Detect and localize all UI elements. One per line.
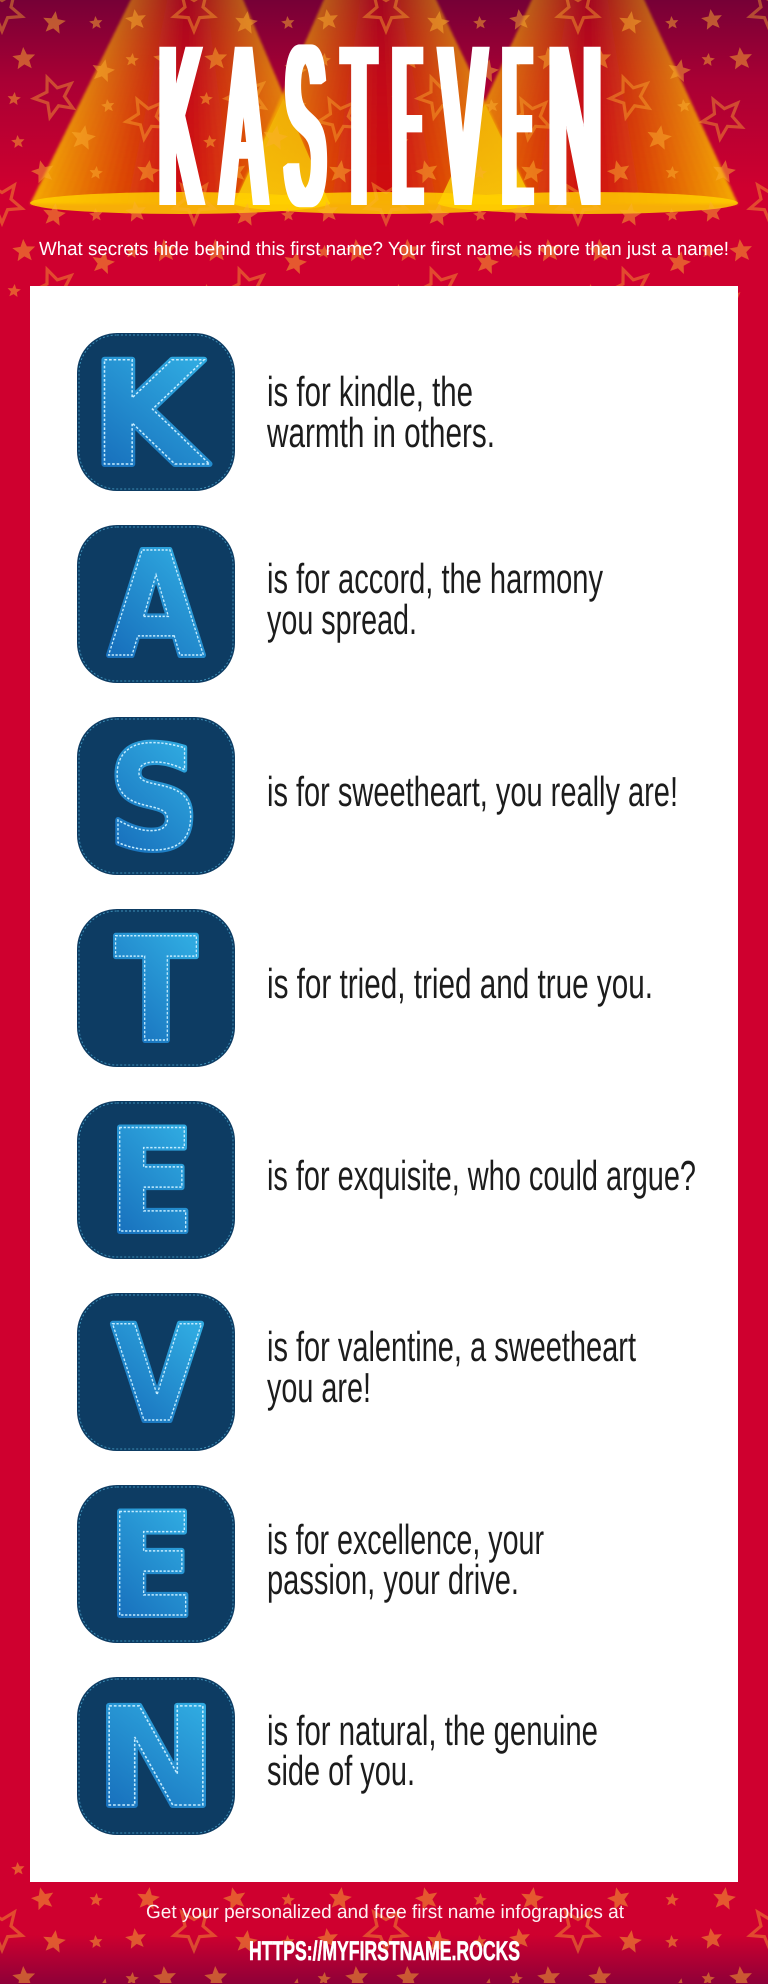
icon: letter E bbox=[77, 1100, 235, 1265]
star pattern: top bbox=[0, 0, 768, 300]
row: S bbox=[77, 717, 678, 882]
row: A bbox=[77, 521, 603, 689]
icon: letter V: V bbox=[112, 1298, 202, 1452]
icon: letter T bbox=[77, 907, 235, 1074]
row: T bbox=[77, 907, 653, 1074]
row: E bbox=[77, 1100, 696, 1265]
text: second E line bbox=[267, 1516, 544, 1603]
title: V bbox=[442, 0, 484, 254]
title: T bbox=[344, 0, 374, 254]
icon: letter S: S bbox=[108, 717, 200, 882]
row: N bbox=[77, 1677, 598, 1838]
text: V line bbox=[267, 1323, 636, 1411]
spotlight: left bbox=[30, 0, 337, 204]
icon: letter V: V bbox=[112, 1298, 202, 1452]
text: N line bbox=[267, 1707, 598, 1794]
title: S bbox=[286, 0, 324, 254]
text: K line: is for kindle, the bbox=[267, 368, 473, 415]
text: A line bbox=[267, 555, 603, 643]
spotlight overlap glow bbox=[234, 99, 534, 204]
icon: letter E: E bbox=[108, 1100, 195, 1265]
icon: letter T: T bbox=[115, 907, 197, 1074]
row: second E bbox=[77, 1484, 544, 1649]
icon: letter E: E bbox=[108, 1484, 195, 1649]
icon: letter E: E bbox=[108, 1484, 195, 1649]
subtitle: What secrets hide behind this first name? Your first name is more than just a name! bbox=[39, 239, 729, 260]
icon: letter E bbox=[77, 1484, 235, 1649]
text: V line: you are! bbox=[267, 1364, 371, 1411]
text: K line bbox=[266, 368, 495, 456]
text: A line: is for accord, the harmony bbox=[267, 555, 603, 602]
icon: letter N: N bbox=[96, 1680, 216, 1838]
row: K bbox=[77, 331, 495, 498]
spotlight: middle bbox=[230, 0, 534, 204]
infographic page: N bbox=[549, 0, 601, 254]
icon: letter N: N bbox=[96, 1680, 216, 1838]
icon: letter V bbox=[77, 1293, 235, 1452]
title: E bbox=[394, 0, 420, 254]
row: V bbox=[77, 1293, 636, 1452]
icon: letter A: A bbox=[108, 521, 204, 689]
spotlight: right bbox=[482, 0, 740, 206]
text: K line: warmth in others. bbox=[266, 409, 495, 456]
star pattern: bottom bbox=[0, 1860, 768, 1983]
title: A bbox=[222, 0, 264, 254]
icon: letter T: T bbox=[115, 907, 197, 1074]
text: second E line: is for excellence, your bbox=[267, 1516, 544, 1563]
spotlight pools of light bbox=[30, 192, 738, 214]
icon: letter E: E bbox=[108, 1100, 195, 1265]
text: N line: side of you. bbox=[267, 1747, 415, 1794]
text: N line: is for natural, the genuine bbox=[267, 1707, 598, 1754]
icon: letter K: K bbox=[91, 331, 210, 498]
title: E bbox=[504, 0, 530, 254]
icon: letter K: K bbox=[91, 331, 210, 498]
panel: letters bbox=[30, 286, 738, 1882]
text: A line: you spread. bbox=[267, 596, 417, 643]
icon: letter S: S bbox=[108, 717, 200, 882]
icon: letter A: A bbox=[108, 521, 204, 689]
footer prompt: Get your personalized and free first name infographics at bbox=[146, 1902, 625, 1923]
text: second E line: passion, your drive. bbox=[267, 1556, 519, 1603]
title: K bbox=[160, 0, 201, 254]
footer url: HTTPS://MYFIRSTNAME.ROCKS bbox=[249, 1936, 520, 1966]
icon: letter S bbox=[77, 717, 235, 882]
